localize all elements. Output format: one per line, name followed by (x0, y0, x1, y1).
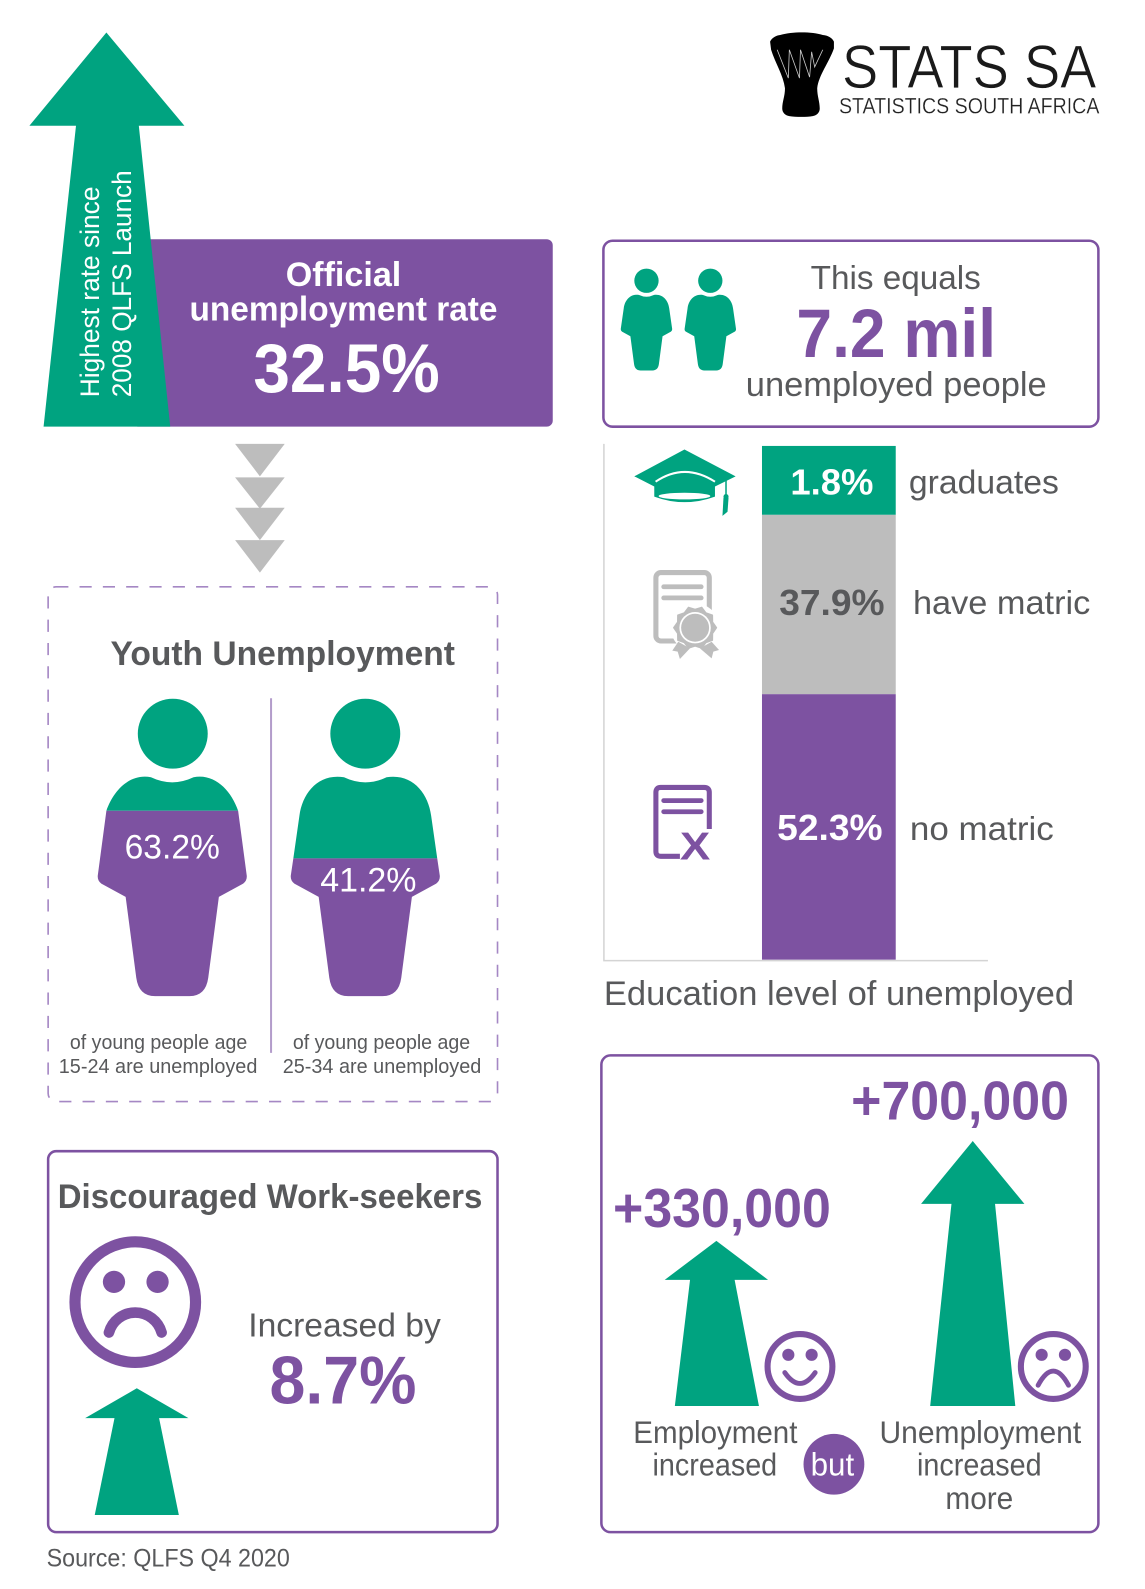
panel: official unemployment rate (29, 33, 553, 427)
chart title: Education level of unemployed (604, 975, 1074, 1013)
bar segment: have matric (762, 515, 896, 694)
bar segment: graduates (762, 446, 896, 515)
label: this equals: This equals (811, 260, 981, 297)
value: +700,000: +700,000 (851, 1070, 1069, 1132)
person: age 25-34: 41.2% (320, 861, 416, 899)
heading: Youth Unemployment (110, 635, 455, 673)
badge: but: but (811, 1446, 854, 1482)
caption: age 25-34: 25-34 are unemployed (283, 1055, 481, 1078)
label: employment increased (633, 1415, 798, 1482)
bar segment: no matric (762, 694, 896, 960)
label: unemployed people: unemployed people (746, 366, 1047, 404)
person: age 15-24: 63.2% (125, 828, 220, 866)
label: unemployment increased more: more (945, 1481, 1013, 1516)
arrow: highest rate (29, 33, 184, 427)
logo subtitle: STATISTICS SOUTH AFRICA (839, 94, 1100, 119)
purple banner (132, 239, 553, 427)
banner heading (189, 256, 498, 328)
arrow caption: 2008 QLFS Launch (107, 170, 137, 397)
caption: age 15-24: 15-24 are unemployed (59, 1055, 257, 1078)
panel: unemployed people (603, 241, 1098, 427)
caption: age 15-24: of young people age (70, 1031, 247, 1054)
dashed frame (48, 587, 498, 1102)
arrow caption (75, 170, 137, 397)
value: +330,000: +330,000 (613, 1177, 831, 1239)
person: age 25-34 (291, 699, 440, 996)
banner heading: unemployment rate (189, 290, 498, 328)
axes (604, 444, 988, 961)
label: employment increased: increased (653, 1447, 777, 1482)
icon: sad face (75, 1242, 196, 1362)
label: employment increased: Employment (633, 1415, 798, 1450)
banner heading: Official (286, 256, 401, 294)
logo: Stats SA (770, 32, 1100, 119)
panel: employment vs unemployment (601, 1055, 1098, 1532)
arrow: grey chevrons down (235, 444, 285, 573)
icon: two people (621, 269, 736, 370)
frame (48, 1151, 498, 1532)
label: no matric: no matric (910, 811, 1054, 848)
arrow caption: Highest rate since (75, 187, 105, 397)
frame (603, 241, 1098, 427)
icon: no certificate (656, 787, 711, 868)
label: unemployment increased more: Unemployment (880, 1415, 1081, 1450)
panel: youth unemployment (48, 587, 498, 1102)
value: 1.8%: 1.8% (790, 462, 873, 503)
icon: no certificate: X (680, 825, 711, 868)
label: unemployment increased more: increased (917, 1447, 1042, 1482)
source note: Source: QLFS Q4 2020 (47, 1545, 290, 1573)
icon: graduation cap (634, 449, 736, 516)
increase label: Increased by (248, 1308, 441, 1345)
person: age 15-24 (98, 699, 247, 996)
icon: certificate (656, 573, 719, 659)
arrow: up (85, 1388, 188, 1515)
divider (270, 698, 272, 1053)
increase value: 8.7% (270, 1343, 416, 1418)
caption: age 25-34 (283, 1031, 481, 1078)
icon: drum (770, 32, 834, 117)
label: graduates: graduates (909, 465, 1059, 502)
caption: age 25-34: of young people age (293, 1031, 470, 1054)
value: 7.2 mil: 7.2 mil (796, 295, 996, 372)
label: have matric: have matric (913, 585, 1090, 622)
logo wordmark: STATS SA (842, 33, 1097, 101)
label: unemployment increased more (880, 1415, 1081, 1516)
value: 37.9%: 37.9% (779, 582, 885, 623)
frame (601, 1055, 1098, 1532)
heading: Discouraged Work-seekers (58, 1178, 482, 1216)
icon: smiling face (768, 1334, 832, 1399)
icon: sad face (1021, 1334, 1086, 1399)
chart: education level of unemployed (604, 444, 1090, 1013)
panel: discouraged work-seekers (48, 1151, 498, 1532)
value: 52.3%: 52.3% (777, 807, 883, 848)
arrow: employment (665, 1241, 768, 1406)
caption: age 15-24 (59, 1031, 257, 1078)
badge: but (804, 1434, 864, 1495)
arrow: unemployment (921, 1141, 1024, 1406)
headline rate: 32.5% (253, 330, 440, 407)
